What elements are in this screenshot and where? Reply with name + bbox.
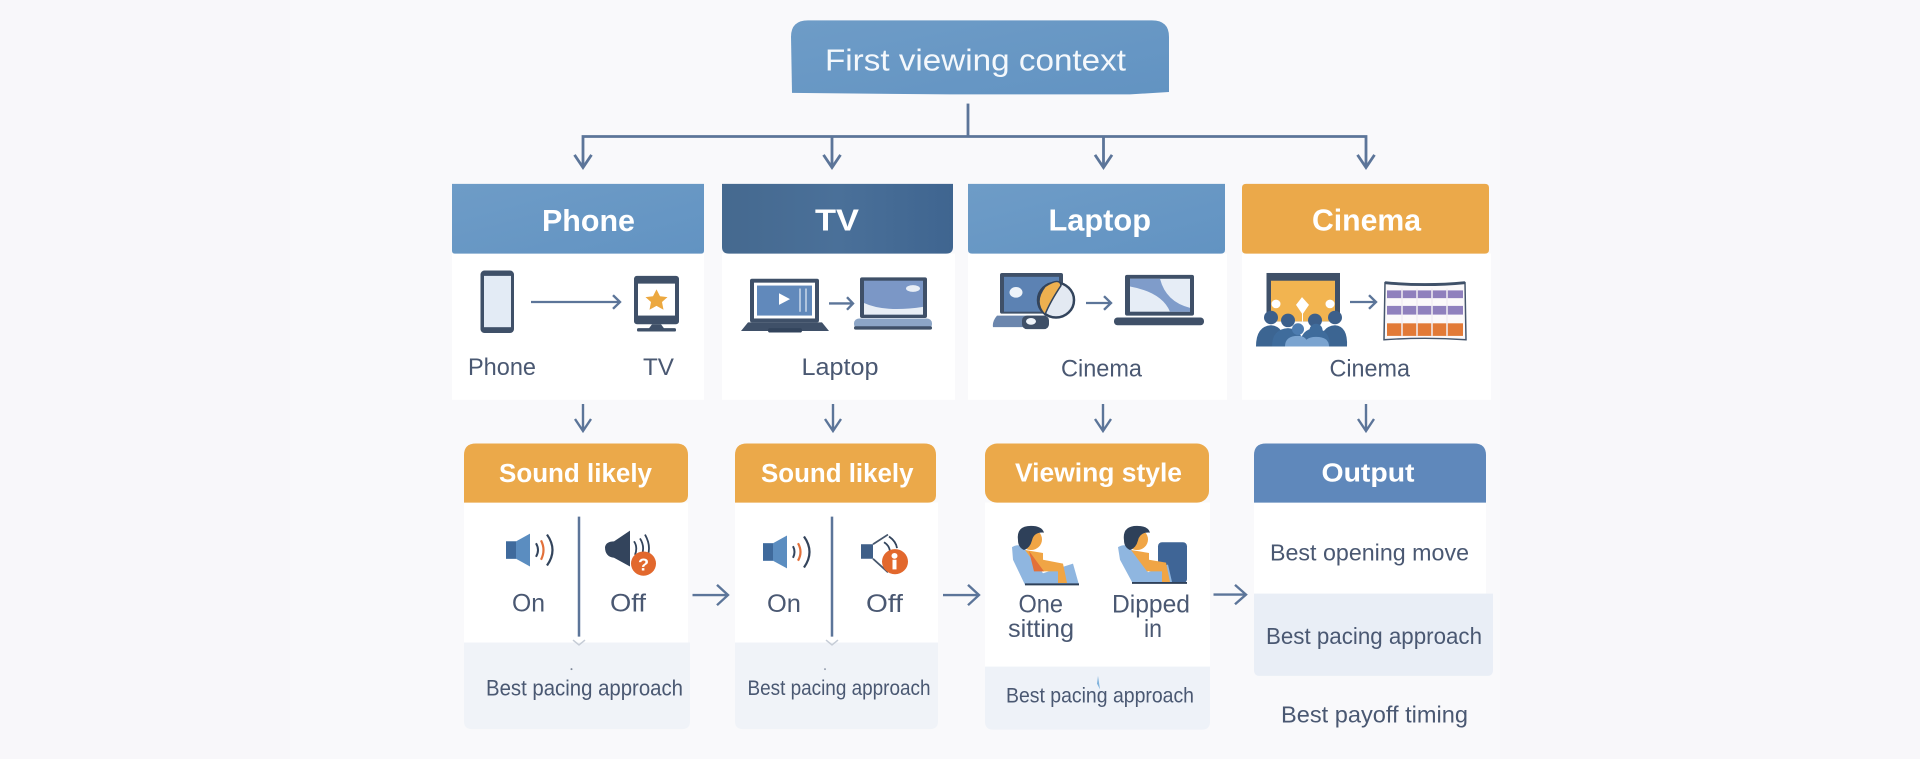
title box: First viewing context bbox=[791, 20, 1169, 94]
pacing panel bbox=[985, 667, 1210, 730]
pacing panel: Best pacing approach bbox=[486, 676, 683, 701]
card: Sound likely 2 bbox=[735, 444, 938, 729]
label: Cinema: Cinema bbox=[1061, 356, 1142, 382]
label: TV: TV bbox=[643, 354, 675, 381]
text: Best opening move: Best opening move bbox=[1270, 541, 1469, 567]
header: Sound likely bbox=[464, 444, 688, 503]
panel: Best pacing approach bbox=[1254, 594, 1493, 676]
label: Dipped in: Dipped bbox=[1112, 591, 1190, 618]
icon: speaker off with alert bbox=[605, 531, 656, 576]
label: Phone: Phone bbox=[468, 354, 536, 381]
card: Sound likely 1 bbox=[464, 444, 690, 729]
lower section: sound, viewing style and output cards bbox=[464, 444, 1493, 730]
header: Phone: Phone bbox=[542, 202, 635, 238]
icon: speaker off with info bbox=[861, 535, 908, 574]
label: Dipped in: in bbox=[1144, 616, 1162, 643]
label: Off: Off bbox=[866, 590, 904, 618]
label: One sitting: sitting bbox=[1008, 616, 1074, 643]
header: Cinema bbox=[1242, 184, 1489, 254]
header: Phone bbox=[452, 184, 704, 254]
card: Viewing style bbox=[985, 444, 1210, 730]
icon: laptop bbox=[854, 277, 932, 330]
header: Viewing style bbox=[985, 444, 1209, 503]
icon: TV with star bbox=[634, 276, 679, 332]
label: Cinema: Cinema bbox=[1330, 356, 1410, 382]
connector tree with four arrows bbox=[574, 104, 1374, 167]
upper section: title, connectors and device panels bbox=[452, 20, 1491, 400]
header: Output bbox=[1254, 444, 1486, 503]
header: Laptop bbox=[968, 184, 1225, 254]
panel: Cinema bbox=[1242, 184, 1491, 400]
label: Laptop: Laptop bbox=[802, 354, 878, 381]
panel: Laptop bbox=[968, 184, 1227, 400]
arrow: card 1 to card 2 bbox=[692, 585, 728, 605]
icon: speaker on bbox=[506, 534, 552, 566]
arrows: columns to lower cards bbox=[575, 404, 1374, 431]
title box: First viewing context: First viewing context bbox=[825, 42, 1126, 78]
header: TV bbox=[722, 184, 953, 254]
label: Off: Off bbox=[610, 590, 647, 617]
icon: cinema seating chart bbox=[1384, 283, 1466, 340]
icon: laptop with video bbox=[741, 279, 829, 333]
header: Cinema: Cinema bbox=[1312, 202, 1421, 237]
label: One sitting bbox=[1008, 591, 1074, 643]
header: Output: Output bbox=[1322, 458, 1415, 487]
label: One sitting: One bbox=[1018, 591, 1063, 618]
arrow: card 3 to output bbox=[1214, 585, 1246, 604]
divider with chevron bbox=[573, 517, 585, 645]
header: Laptop: Laptop bbox=[1048, 202, 1151, 237]
pacing panel bbox=[464, 642, 690, 729]
panel: Best pacing approach: Best pacing approach bbox=[1266, 624, 1482, 650]
icon: person one sitting bbox=[1012, 526, 1079, 585]
icon: laptop with lens bbox=[993, 273, 1074, 329]
icon: cinema screen and audience bbox=[1256, 273, 1347, 347]
icon: speaker on bbox=[763, 536, 810, 568]
header: Sound likely: Sound likely bbox=[761, 458, 914, 488]
header: Sound likely bbox=[735, 444, 936, 503]
icon: person dipped in bbox=[1118, 526, 1187, 583]
divider with chevron bbox=[826, 517, 838, 645]
header: TV: TV bbox=[815, 202, 859, 237]
pacing panel bbox=[735, 642, 938, 729]
icon: speaker off with alert: ? bbox=[638, 555, 649, 574]
label: On: On bbox=[512, 590, 545, 617]
arrow: laptop step bbox=[1086, 296, 1111, 310]
header: Viewing style: Viewing style bbox=[1015, 458, 1182, 487]
pacing panel: Best pacing approach bbox=[1006, 685, 1194, 707]
label: Dipped in bbox=[1112, 591, 1190, 643]
panel: Phone bbox=[452, 184, 704, 400]
icon: phone bbox=[480, 271, 514, 333]
panel: TV bbox=[722, 184, 955, 400]
card: Output bbox=[1254, 444, 1493, 728]
icon: laptop bbox=[1114, 275, 1204, 325]
label: On: On bbox=[767, 590, 801, 618]
text: Best payoff timing: Best payoff timing bbox=[1281, 703, 1468, 728]
arrow: TV step bbox=[829, 297, 853, 310]
header: Sound likely: Sound likely bbox=[499, 458, 652, 488]
arrow: phone to TV bbox=[531, 295, 620, 309]
arrow: cinema step bbox=[1350, 295, 1376, 309]
arrow: card 2 to card 3 bbox=[943, 585, 979, 605]
pacing panel: Best pacing approach bbox=[748, 676, 931, 700]
